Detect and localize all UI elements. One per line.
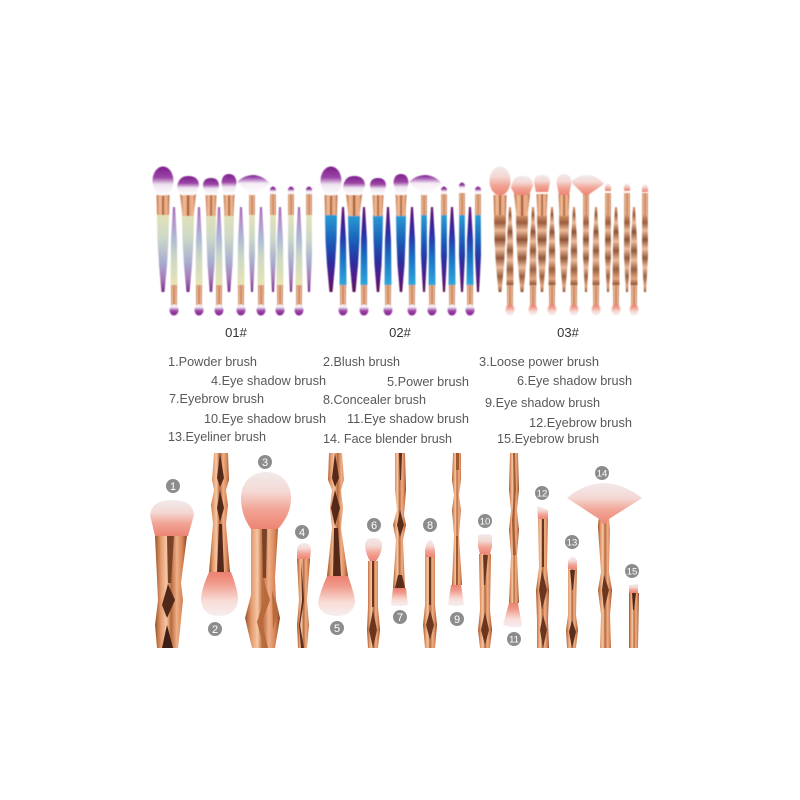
brush set 03: rose gold handles with pink bristles [490, 166, 648, 316]
brush 15: eyebrow brush [629, 584, 639, 648]
text block: numbered list of brush names: 14. Face blender brush [323, 431, 452, 446]
number badges for brushes 1 to 15: 11 [509, 634, 519, 646]
label: 02#: 02# [389, 325, 412, 340]
text block: numbered list of brush names: 11.Eye shadow brush [347, 411, 469, 426]
text block: numbered list of brush names: 7.Eyebrow brush [169, 391, 264, 406]
text block: numbered list of brush names [168, 354, 632, 446]
text block: numbered list of brush names: 12.Eyebrow brush [529, 415, 632, 430]
number badges for brushes 1 to 15: 4 [299, 527, 305, 539]
text block: numbered list of brush names: 3.Loose power brush [479, 354, 599, 369]
text block: numbered list of brush names: 9.Eye shadow brush [485, 395, 600, 410]
number badges for brushes 1 to 15: 8 [427, 520, 433, 532]
number badges for brushes 1 to 15: 5 [334, 623, 340, 635]
number badges for brushes 1 to 15: 12 [537, 488, 547, 500]
brush 13: eyeliner brush [566, 557, 578, 648]
brush 7: eyebrow brush [391, 453, 408, 606]
number badges for brushes 1 to 15: 2 [212, 624, 218, 636]
number badges for brushes 1 to 15: 14 [597, 468, 607, 480]
number badges for brushes 1 to 15: 1 [170, 481, 176, 493]
brush 5: power brush [318, 453, 355, 616]
text block: numbered list of brush names: 8.Concealer brush [323, 392, 426, 407]
text block: numbered list of brush names: 10.Eye shadow brush [204, 411, 326, 426]
number badges for brushes 1 to 15: 15 [627, 566, 637, 578]
text block: numbered list of brush names: 2.Blush brush [323, 354, 400, 369]
brush 3: loose powder brush [241, 472, 291, 648]
brush 1: powder brush [150, 500, 194, 648]
brush 12: eyebrow brush [536, 506, 549, 648]
brush set 01: iridescent handles with purple bristles [152, 166, 312, 316]
text block: numbered list of brush names: 13.Eyeliner brush [168, 429, 266, 444]
brush 11: eye shadow brush [503, 453, 522, 627]
number badges for brushes 1 to 15: 7 [397, 612, 403, 624]
number badges for brushes 1 to 15 [166, 455, 639, 646]
brush 6: eye shadow brush [365, 538, 382, 648]
text block: numbered list of brush names: 5.Power brush [387, 374, 469, 389]
brush 14: face blender fan brush [567, 483, 642, 648]
brush 2: blush brush [201, 453, 238, 616]
number badges for brushes 1 to 15: 6 [371, 520, 377, 532]
text block: numbered list of brush names: 15.Eyebrow brush [497, 431, 599, 446]
label: 03#: 03# [557, 325, 580, 340]
text block: numbered list of brush names: 1.Powder brush [168, 354, 257, 369]
text block: numbered list of brush names: 4.Eye shadow brush [211, 373, 326, 388]
brush 4: eye shadow brush [297, 543, 311, 648]
brush 9: eye shadow brush [448, 453, 464, 606]
label: 01#: 01# [225, 325, 248, 340]
number badges for brushes 1 to 15: 10 [480, 516, 490, 528]
text block: numbered list of brush names: 6.Eye shadow brush [517, 373, 632, 388]
number badges for brushes 1 to 15: 3 [262, 457, 268, 469]
number badges for brushes 1 to 15: 13 [567, 538, 577, 548]
brush 8: concealer brush [423, 540, 437, 648]
number badges for brushes 1 to 15: 9 [454, 614, 460, 626]
brush set 02: blue handles with purple bristles [320, 166, 481, 316]
brush 10: eye shadow brush [478, 534, 492, 648]
